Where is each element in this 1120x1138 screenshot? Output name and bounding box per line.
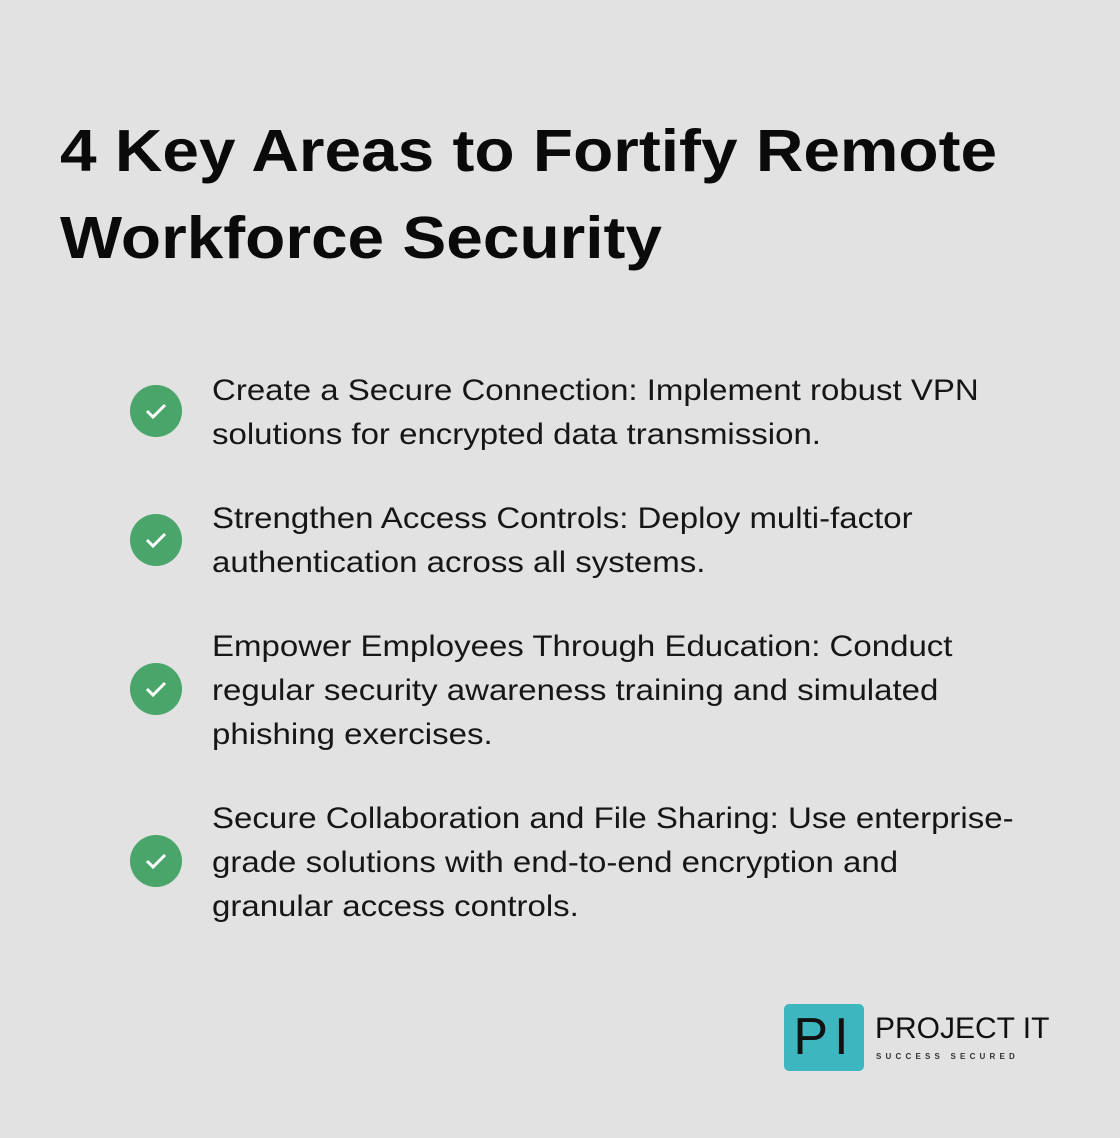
text 2 xyxy=(212,502,913,579)
text 4: grade solutions with end-to-end encryption and xyxy=(212,846,898,879)
icon: check xyxy=(130,663,182,715)
text 4: Secure Collaboration and File Sharing: Use enterprise- xyxy=(212,802,1014,835)
text 4 xyxy=(212,802,1014,923)
text 2: Strengthen Access Controls: Deploy multi-factor xyxy=(212,502,913,535)
item 3 xyxy=(130,630,952,751)
icon: check xyxy=(130,514,182,566)
logo mark xyxy=(784,1004,864,1071)
text 3: regular security awareness training and simulated xyxy=(212,674,938,707)
title xyxy=(60,118,997,271)
text 3 xyxy=(212,630,952,751)
text 3: phishing exercises. xyxy=(212,718,493,751)
icon: check xyxy=(130,835,182,887)
text 1: Create a Secure Connection: Implement robust VPN xyxy=(212,374,979,407)
text 2: authentication across all systems. xyxy=(212,546,705,579)
text 1 xyxy=(212,374,979,451)
tagline: SUCCESS SECURED xyxy=(876,1052,1019,1061)
text 4: granular access controls. xyxy=(212,890,579,923)
logo xyxy=(784,1004,1049,1071)
text 3: Empower Employees Through Education: Conduct xyxy=(212,630,952,663)
logo mark: PI xyxy=(793,1008,855,1066)
item 2 xyxy=(130,502,913,579)
text 1: solutions for encrypted data transmission. xyxy=(212,418,821,451)
logo name: PROJECT IT xyxy=(875,1012,1049,1045)
icon: check xyxy=(130,385,182,437)
item 4 xyxy=(130,802,1014,923)
title: 4 Key Areas to Fortify Remote xyxy=(60,118,997,184)
item 1 xyxy=(130,374,979,451)
title: Workforce Security xyxy=(60,205,662,271)
